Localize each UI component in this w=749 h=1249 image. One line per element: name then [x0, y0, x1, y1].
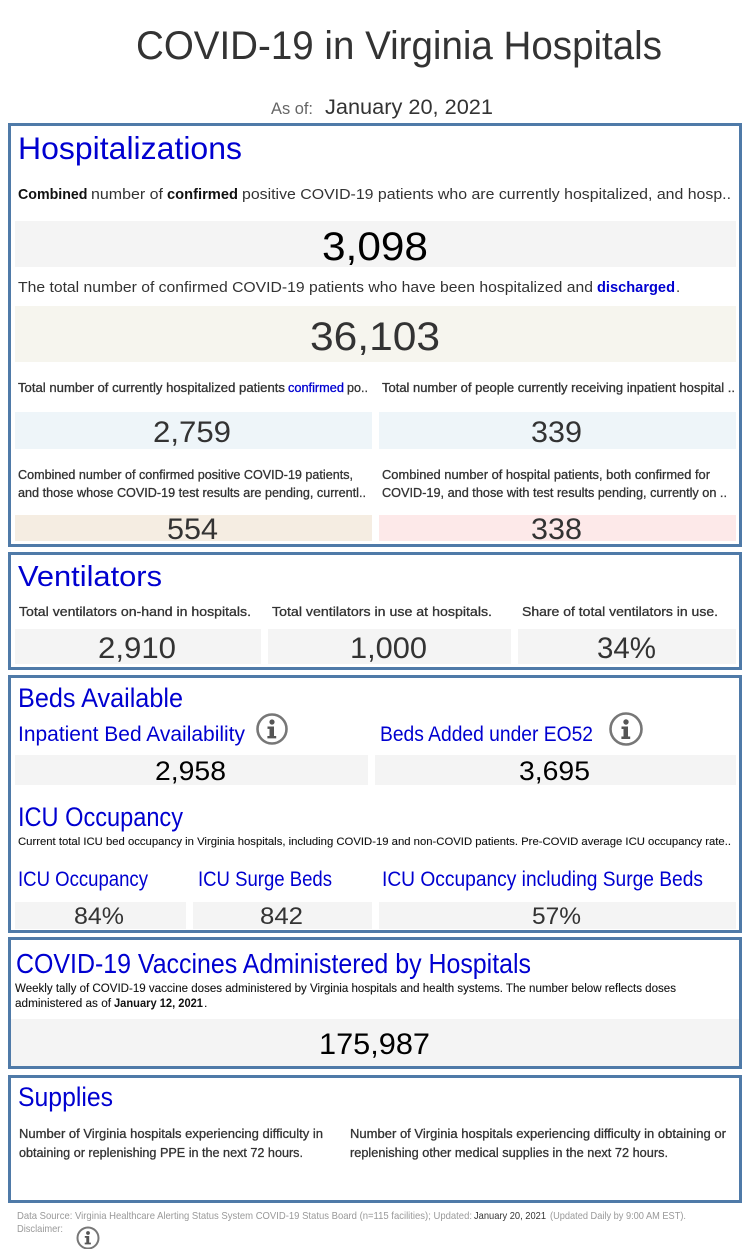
subheading: inpatient bed availability: Inpatient Bed Availability	[18, 723, 245, 746]
subheading: beds added under EO52: Beds Added under EO52	[380, 723, 593, 746]
stat: 339	[379, 412, 736, 449]
subheading: ICU surge beds: ICU Surge Beds	[198, 868, 332, 891]
description: vaccines	[15, 981, 676, 1010]
description: combined hospitalized: confirmed	[167, 186, 238, 203]
stat: 2,910: 2,910	[98, 632, 176, 665]
description: combined hospitalized	[18, 186, 731, 203]
label: on ventilators: Combined number of hospital patients, both confirmed for	[382, 468, 710, 482]
heading: hospitalizations: Hospitalizations	[18, 130, 242, 166]
as-of date: January 20, 2021	[325, 96, 493, 119]
heading: ventilators: Ventilators	[18, 561, 162, 593]
icon: info	[258, 714, 286, 744]
stat: 842: 842	[260, 903, 303, 930]
stat: 554: 554	[167, 513, 218, 546]
label: combined confirmed and pending: and those whose COVID-19 test results are pending, currentl..	[18, 486, 366, 500]
stat: 842	[193, 902, 372, 930]
description: discharged: .	[676, 279, 680, 296]
stat: 2,958: 2,958	[155, 756, 226, 786]
stat: 84%	[15, 902, 186, 930]
panel: vaccines	[10, 938, 740, 1068]
stat: 1,000	[268, 629, 511, 665]
panel: supplies	[10, 1076, 740, 1202]
footer: data source: Data Source: Virginia Healthcare Alerting Status System COVID-19 Status Board (n=115 facilities); Updated:	[17, 1211, 472, 1222]
stat: 175,987: 175,987	[319, 1028, 430, 1061]
label: on-hand: Total ventilators on-hand in hospitals.	[19, 604, 251, 619]
label: share in use: Share of total ventilators in use.	[522, 604, 718, 619]
icon: info	[78, 1228, 98, 1248]
stat: 2,759	[15, 412, 372, 449]
stat: 3,695: 3,695	[519, 756, 590, 786]
heading: beds available: Beds Available	[18, 683, 183, 713]
title: COVID-19 in Virginia Hospitals	[136, 24, 662, 68]
subheading: ICU occupancy: ICU Occupancy	[18, 868, 148, 891]
panel: hospitalizations	[10, 124, 740, 546]
stat: 36,103: 36,103	[310, 315, 440, 359]
panel: beds available	[10, 676, 740, 932]
label: PPE difficulty: Number of Virginia hospitals experiencing difficulty in	[19, 1126, 323, 1141]
subheading: ICU occupancy including surge beds: ICU Occupancy including Surge Beds	[382, 868, 703, 891]
description: ICU occupancy: Current total ICU bed occupancy in Virginia hospitals, including COVID-19 and non-COVID patients. Pre-COVID average ICU occupancy rate..	[18, 836, 731, 848]
footer: data source: (Updated Daily by 9:00 AM EST).	[550, 1211, 686, 1222]
description: vaccines: January 12, 2021	[114, 996, 203, 1010]
description: combined hospitalized: Combined	[18, 186, 88, 203]
stat: 339: 339	[531, 416, 582, 449]
label: on ventilators	[382, 468, 727, 500]
stat: 3,695	[375, 755, 736, 786]
description: combined hospitalized: positive COVID-19 patients who are currently hospitalized, and hosp..	[242, 186, 731, 203]
label: combined confirmed and pending: Combined number of confirmed positive COVID-19 patients,	[18, 468, 353, 482]
stat: 57%	[379, 902, 736, 930]
stat: 1,000: 1,000	[350, 632, 427, 665]
label: other supplies difficulty: Number of Virginia hospitals experiencing difficulty in obtaining or	[350, 1126, 727, 1141]
label: confirmed patients: po..	[347, 381, 368, 395]
stat: 34%	[518, 629, 736, 665]
stat: 554	[15, 513, 372, 546]
stat: 175,987	[11, 1019, 739, 1066]
heading: ICU occupancy: ICU Occupancy	[18, 802, 184, 832]
stat: 3,098	[15, 221, 736, 269]
description: discharged: discharged	[597, 279, 675, 296]
label: on ventilators: COVID-19, and those with test results pending, currently on ..	[382, 486, 727, 500]
stat: 2,910	[15, 629, 261, 665]
label: combined confirmed and pending	[18, 468, 366, 500]
stat: 36,103	[15, 306, 736, 362]
description: combined hospitalized: number of	[91, 186, 164, 203]
label: confirmed patients: Total number of currently hospitalized patients	[18, 381, 285, 395]
icon: info	[610, 714, 642, 744]
footer: disclaimer: Disclaimer:	[17, 1224, 63, 1235]
stat: 3,098: 3,098	[322, 225, 428, 269]
panel: ventilators	[10, 554, 740, 668]
heading: vaccines: COVID-19 Vaccines Administered by Hospitals	[16, 948, 531, 979]
stat: 338: 338	[531, 513, 582, 546]
stat: 57%: 57%	[532, 903, 581, 930]
label: other supplies difficulty: replenishing other medical supplies in the next 72 hours.	[350, 1145, 668, 1160]
as-of date: As of:	[271, 99, 313, 118]
heading: supplies: Supplies	[18, 1082, 113, 1112]
description: discharged: The total number of confirmed COVID-19 patients who have been hospitalized and	[18, 279, 593, 296]
label: other supplies difficulty	[350, 1126, 727, 1160]
description: vaccines: .	[204, 996, 207, 1010]
label: PPE difficulty	[19, 1126, 323, 1160]
label: inpatient care: Total number of people currently receiving inpatient hospital ..	[382, 381, 735, 395]
description: vaccines: Weekly tally of COVID-19 vaccine doses administered by Virginia hospitals and health systems. The number below reflects doses	[15, 981, 676, 995]
footer: data source: January 20, 2021	[474, 1211, 546, 1222]
stat: 2,958	[15, 755, 368, 786]
label: confirmed patients: confirmed	[288, 381, 344, 395]
stat: 84%: 84%	[74, 903, 124, 930]
stat: 338	[379, 513, 736, 546]
label: PPE difficulty: obtaining or replenishing PPE in the next 72 hours.	[19, 1145, 303, 1160]
label: in use: Total ventilators in use at hospitals.	[272, 604, 492, 619]
description: vaccines: administered as of	[15, 996, 112, 1010]
stat: 2,759: 2,759	[153, 416, 231, 449]
stat: 34%: 34%	[597, 632, 656, 665]
